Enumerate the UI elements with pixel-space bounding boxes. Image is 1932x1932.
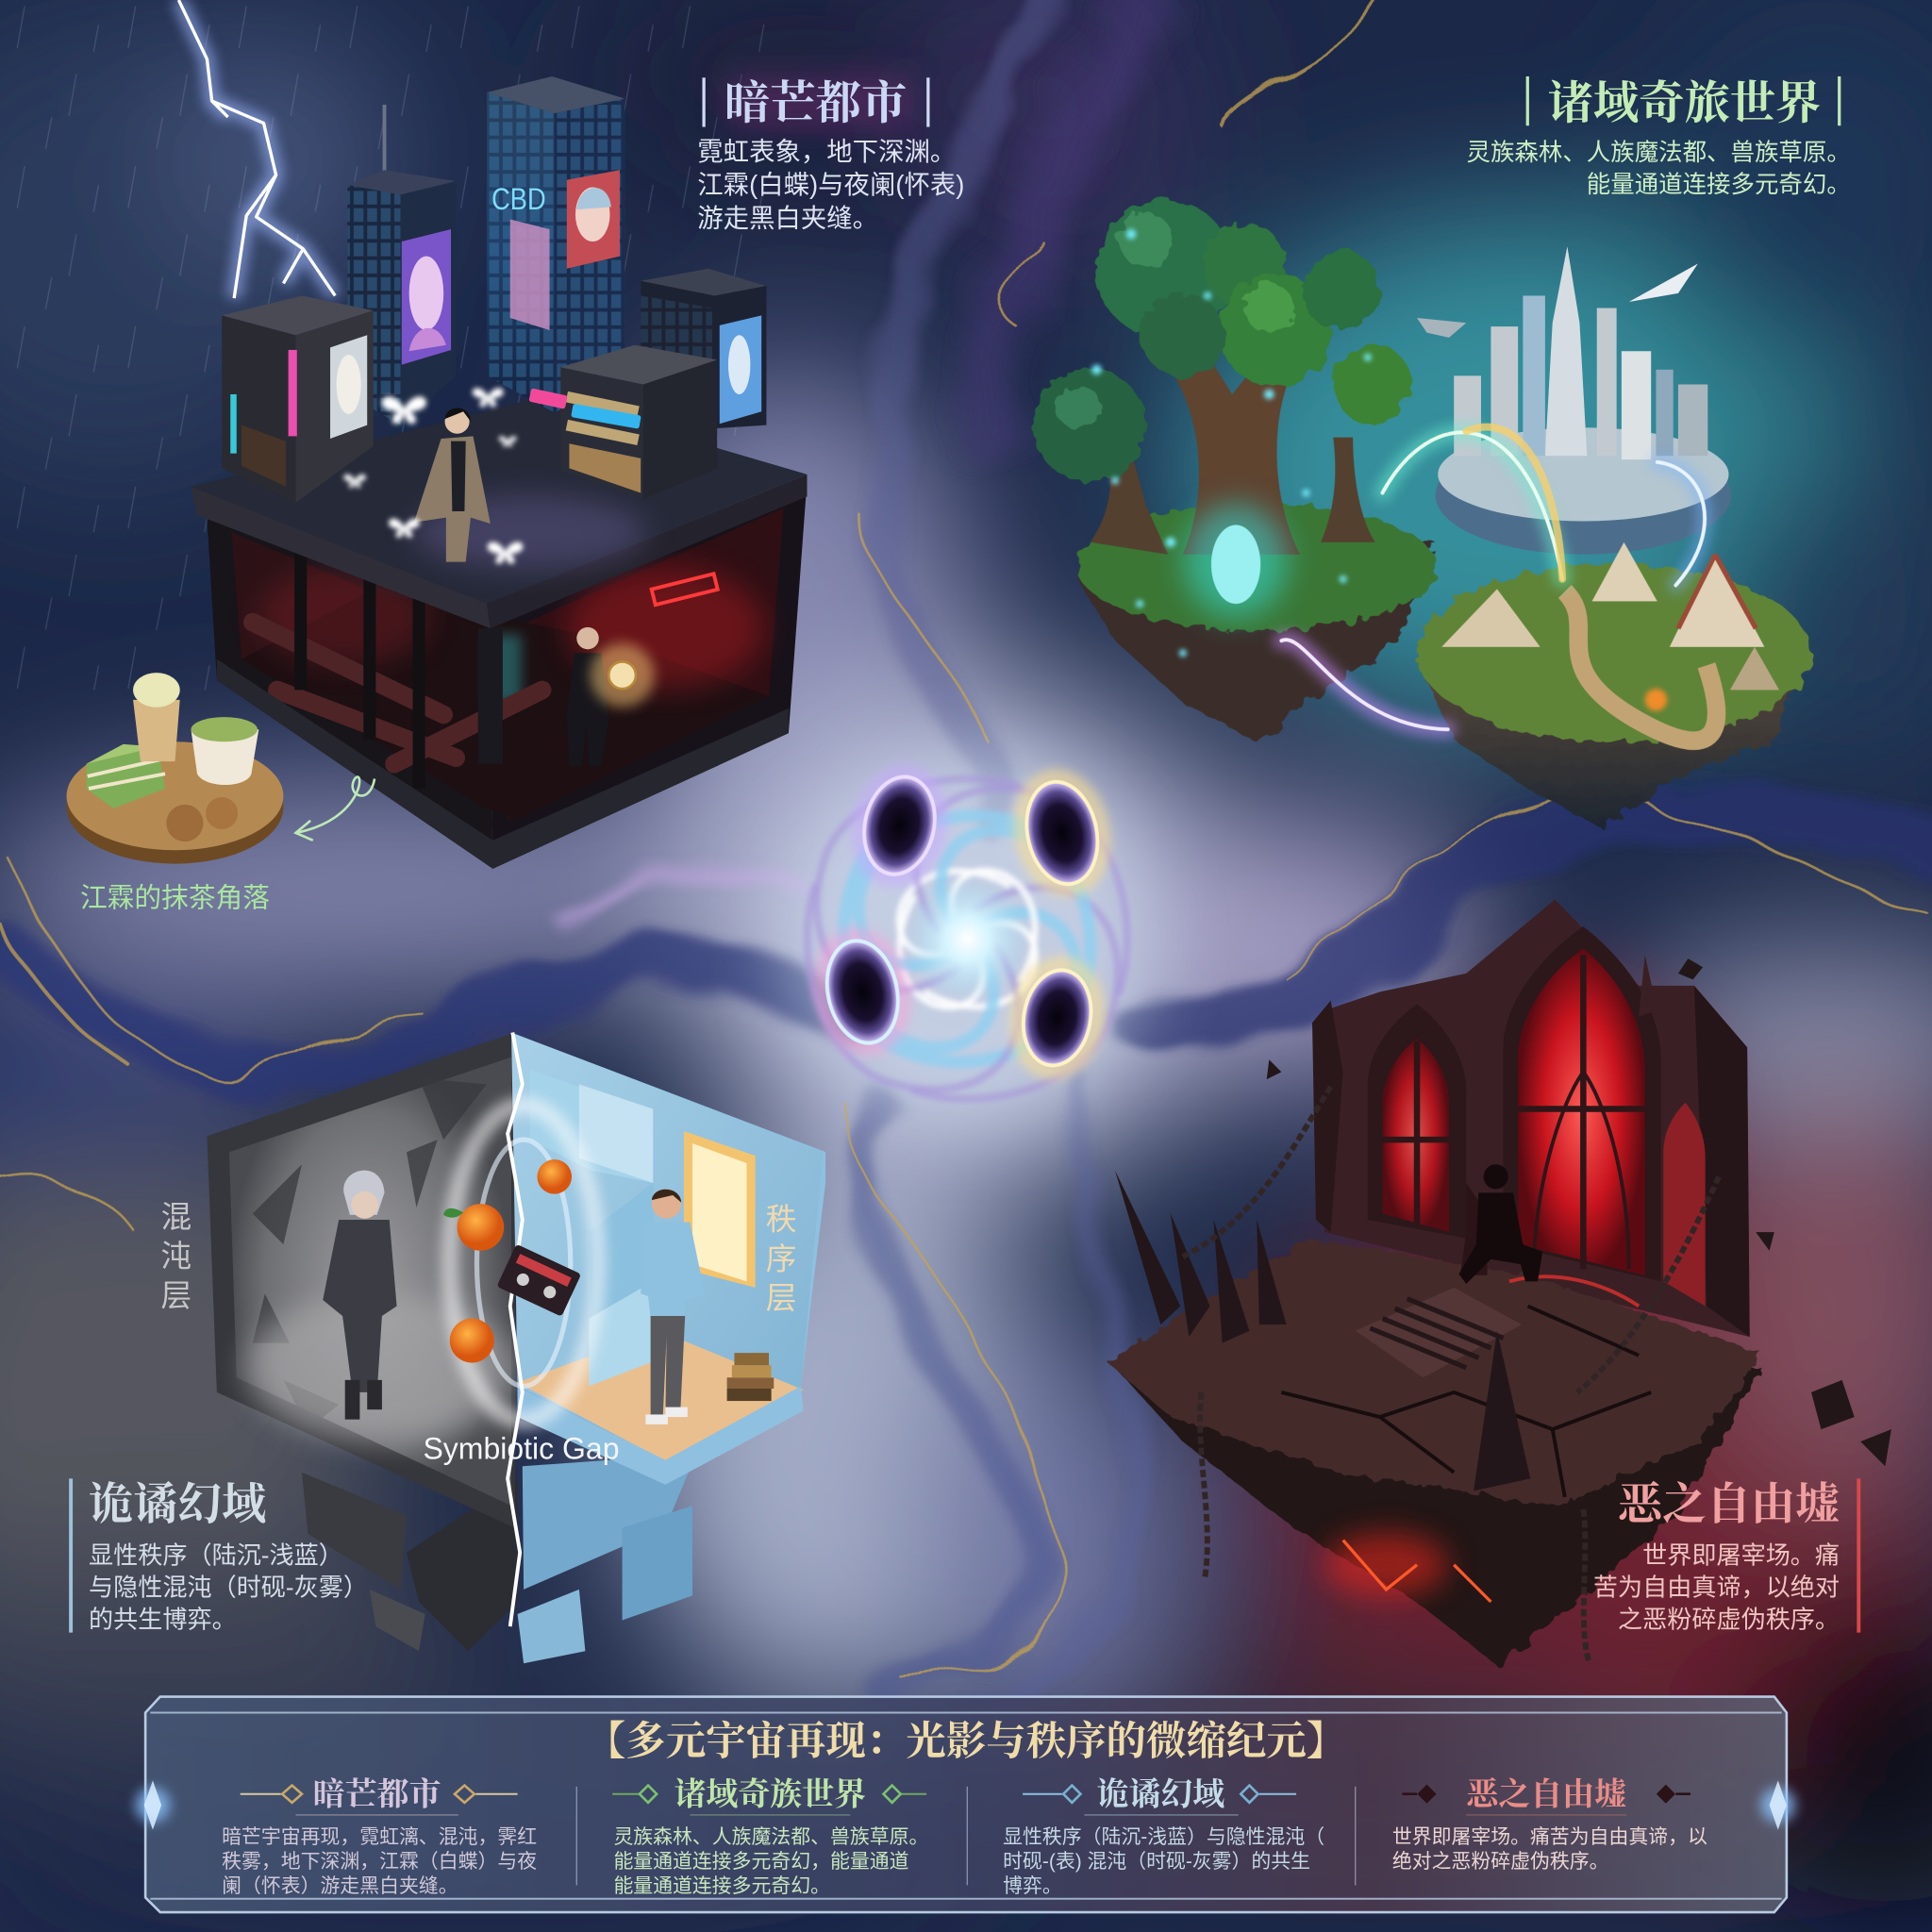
title block: free ruins of evil: 恶之自由墟 — [1618, 1480, 1840, 1529]
label: order layer: 序 — [766, 1241, 796, 1275]
portal bottom-left — [812, 928, 913, 1056]
label: matcha corner: 江霖的抹茶角落 — [80, 883, 270, 913]
label: chaos layer: 沌 — [160, 1239, 192, 1274]
chaos layer wall — [207, 1033, 518, 1528]
energy channels — [1281, 427, 1705, 729]
title block: illusion domain: 的共生博弈。 — [89, 1605, 237, 1633]
character: man holding pocket watch underground — [567, 627, 655, 766]
chains — [1183, 1087, 1719, 1663]
title block: illusion domain: 与隐性混沌（时砚-灰雾） — [89, 1573, 368, 1601]
cathedral ruin walls — [1312, 899, 1750, 1337]
column: illusion domain: 诡谲幻域 — [1096, 1776, 1224, 1812]
column: dark city: 暗芒宇宙再现，霓虹漓、混沌，霁红 — [222, 1826, 537, 1848]
character: light blue shirt order figure — [641, 1189, 705, 1424]
column: free ruins of evil: 绝对之恶粉碎虚伪秩序。 — [1392, 1851, 1609, 1873]
column: illusion domain: 显性秩序（陆沉-浅蓝）与隐性混沌（ — [1003, 1826, 1324, 1848]
title block: free ruins of evil — [1593, 1478, 1860, 1633]
cracked stone platform — [1107, 1239, 1762, 1506]
portal top-left — [850, 764, 949, 887]
title block: free ruins of evil: 世界即屠宰场。痛 — [1642, 1541, 1840, 1569]
rooftop towers and billboards — [222, 76, 766, 503]
icon: stack of books — [727, 1353, 774, 1401]
left glowing gem — [136, 1780, 170, 1830]
label: chaos layer: 混 — [160, 1199, 192, 1234]
panel title: 【多元宇宙再现：光影与秩序的微缩纪元】 — [586, 1720, 1346, 1764]
column: fantasy worlds — [612, 1776, 928, 1897]
icons: white butterflies — [343, 388, 523, 564]
column: dark city: 暗芒都市 — [313, 1776, 441, 1812]
column: free ruins of evil — [1392, 1776, 1707, 1873]
stone slab cutaway — [191, 397, 808, 869]
beast grassland island — [1417, 542, 1811, 828]
spikes — [1115, 1171, 1530, 1491]
isometric city: neon surface and underground abyss — [191, 76, 808, 869]
floating worlds: forest, magic city, beast grassland — [1033, 200, 1811, 828]
right glowing gem — [1760, 1780, 1795, 1830]
matcha corner: plate, cake and cups — [67, 673, 283, 864]
glass summary panel — [136, 1697, 1795, 1912]
title block: illusion domain: 显性秩序（陆沉-浅蓝） — [89, 1541, 343, 1569]
central vortex with four portals — [782, 754, 1152, 1124]
portal bottom-right — [1009, 958, 1106, 1078]
column: illusion domain: 时砚-(表) 混沌（时砚-灰雾）的共生 — [1003, 1851, 1310, 1873]
column: dark city — [222, 1776, 537, 1897]
column: dark city: 阑（怀表）游走黑白夹缝。 — [222, 1875, 458, 1897]
column: illusion domain: 博弈。 — [1003, 1875, 1062, 1897]
title block: dark city: 江霖(白蝶)与夜阑(怀表) — [697, 170, 964, 199]
title block: free ruins of evil: 苦为自由真谛，以绝对 — [1593, 1573, 1840, 1601]
flying debris — [1267, 958, 1891, 1466]
title block: dark city: 游走黑白夹缝。 — [697, 203, 878, 232]
column: fantasy worlds: 灵族森林、人族魔法都、兽族草原。 — [613, 1826, 928, 1848]
enchanted forest island — [1033, 200, 1437, 741]
title block: dark city — [697, 74, 964, 232]
order layer room — [511, 1033, 825, 1485]
figure: silhouette on throne — [1458, 1164, 1542, 1284]
title block: fantasy worlds — [1467, 76, 1851, 198]
ruined gothic throne island — [1107, 899, 1891, 1666]
column: fantasy worlds: 诸域奇族世界 — [675, 1776, 866, 1812]
symbiotic cube room: chaos vs order — [160, 1033, 825, 1663]
character: silver hair chaos figure — [323, 1171, 397, 1420]
label: order layer: 秩 — [766, 1202, 796, 1237]
title block: illusion domain — [69, 1478, 368, 1633]
column: illusion domain — [1003, 1776, 1324, 1897]
column: fantasy worlds: 能量通道连接多元奇幻，能量通道 — [613, 1851, 909, 1873]
arrow: from city to matcha corner — [295, 777, 375, 841]
title block: illusion domain: 诡谲幻域 — [89, 1480, 266, 1529]
magic sky city island — [1417, 246, 1731, 555]
column: dark city: 秩雾，地下深渊，江霖（白蝶）与夜 — [222, 1851, 537, 1873]
label: chaos layer: 层 — [160, 1277, 192, 1312]
lightning bolt — [178, 0, 335, 298]
column: fantasy worlds: 能量通道连接多元奇幻。 — [613, 1875, 830, 1897]
title block: free ruins of evil: 之恶粉碎虚伪秩序。 — [1618, 1605, 1840, 1633]
character: man in coat on the surface — [414, 408, 491, 562]
title block: fantasy worlds: 诸域奇旅世界 — [1548, 77, 1821, 128]
floating rock underside — [1115, 1368, 1762, 1666]
label: symbiotic gap: Symbiotic Gap — [423, 1431, 620, 1465]
icon: cassette tape — [497, 1244, 581, 1317]
title block: fantasy worlds: 灵族森林、人族魔法都、兽族草原。 — [1467, 140, 1851, 166]
gap portal with white swirl — [450, 1033, 597, 1626]
label: order layer: 层 — [766, 1280, 796, 1315]
falling shards below the room — [302, 1454, 696, 1663]
title block: dark city: 霓虹表象，地下深渊。 — [697, 137, 956, 166]
title block: fantasy worlds: 能量通道连接多元奇幻。 — [1587, 172, 1851, 198]
icon: oranges — [443, 1159, 572, 1363]
title block: dark city: 暗芒都市 — [724, 77, 907, 128]
text: CBD sign: CBD — [491, 181, 546, 216]
column: free ruins of evil: 恶之自由墟 — [1466, 1776, 1626, 1812]
portal top-right — [1012, 769, 1112, 896]
column: free ruins of evil: 世界即屠宰场。痛苦为自由真谛，以 — [1392, 1826, 1707, 1848]
